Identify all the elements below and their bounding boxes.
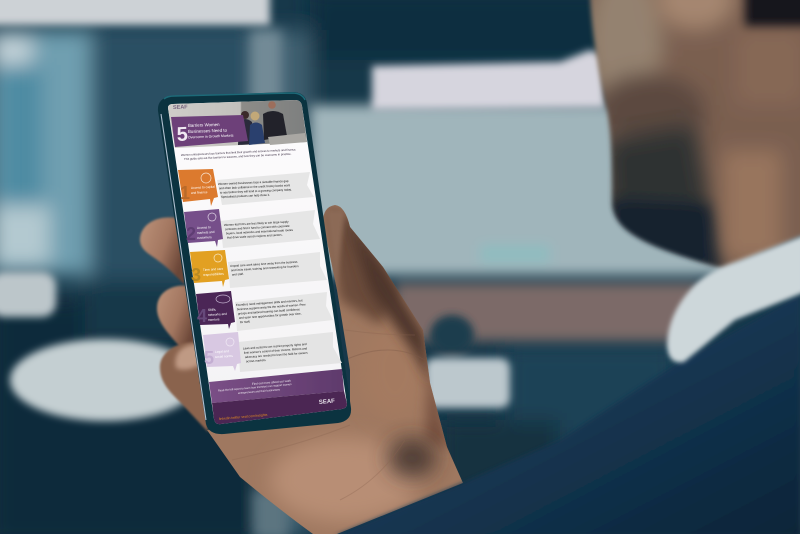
header photo	[168, 100, 307, 148]
body copy: groups and tailored training can build confidence	[238, 307, 301, 316]
item 3	[190, 250, 327, 288]
middle finger	[157, 286, 198, 347]
body copy: Women-owned businesses face a sizeable finance gap	[218, 179, 289, 186]
lilac callout	[203, 332, 241, 371]
body copy: that drive scale across regions and sectors.	[227, 233, 283, 240]
footer dark band	[212, 391, 347, 424]
number: 1	[180, 183, 190, 203]
body copy	[224, 220, 294, 240]
yellow callout	[190, 250, 229, 287]
body copy: to see before they will lend to a growing company today.	[220, 187, 292, 195]
body copy: Specialised products can help close it.	[221, 193, 270, 199]
icon	[208, 213, 216, 221]
body copy: Laws and customs can restrict property rights and	[243, 342, 307, 350]
footer purple band: entrepreneurs and their businesses	[238, 387, 281, 395]
body copy: and open new opportunities for growth over time.	[239, 312, 302, 320]
label: Access to capital	[191, 185, 215, 190]
dark purple callout	[196, 291, 235, 329]
arrow band	[235, 292, 333, 331]
body copy: and staff.	[232, 272, 244, 277]
item 2	[184, 209, 320, 248]
intro text: This guide sets out five barriers to success, and how they can be overcome in practice.	[184, 152, 292, 161]
label: Skills,	[208, 307, 216, 312]
label: Time and care	[203, 267, 224, 272]
item 3: responsibilities	[203, 272, 224, 277]
item 4	[196, 291, 333, 331]
man: navy jacket	[335, 295, 800, 534]
ring fingertip highlight	[175, 344, 204, 370]
phone side highlight	[161, 114, 206, 420]
arrow band	[228, 252, 327, 288]
body copy: and limits travel, training and networking for founders	[231, 264, 299, 272]
arrow band	[238, 332, 342, 372]
item 4: networks and	[208, 312, 227, 317]
item 1	[178, 169, 314, 206]
body copy: Founders need management skills and mentors, but	[236, 298, 303, 307]
item 2: customers	[197, 235, 212, 240]
item 5	[203, 332, 342, 372]
number: 3	[191, 265, 201, 285]
body copy: business support rarely fits the needs of women. Peer	[237, 302, 306, 311]
phone body	[158, 92, 351, 434]
phone screen infographic	[168, 100, 347, 424]
body copy: contracts and find it hard to connect with corporate	[225, 224, 290, 231]
body copy: and often lack collateral or the credit history banks want	[219, 183, 290, 190]
body copy	[230, 260, 299, 277]
body copy: advocacy are needed to level the field for owners	[245, 351, 308, 359]
item 4: mentors	[208, 317, 220, 322]
hand holding the phone	[140, 205, 463, 534]
orange callout	[178, 169, 218, 206]
body copy: across markets.	[246, 358, 267, 363]
header title banner	[171, 115, 248, 147]
label: Legal and	[215, 349, 229, 354]
body copy: buyers, local networks and international trade routes	[226, 228, 294, 235]
body copy: Women-led firms are less likely to win large supply	[224, 220, 289, 227]
man: head and beard	[587, 0, 800, 272]
body copy: limit women's control of their income. Reform and	[244, 346, 308, 355]
footer purple band: Read the full report to learn how investors can support women	[218, 382, 292, 392]
body copy	[236, 298, 306, 324]
icon	[214, 254, 222, 262]
item 2: markets and	[197, 230, 215, 235]
number: 4	[197, 306, 207, 326]
footer purple band: Find out more about our work	[252, 379, 292, 386]
icon	[226, 338, 234, 346]
arrow band	[220, 210, 320, 248]
palm and wrist	[207, 205, 463, 534]
number: 2	[186, 224, 196, 244]
header title banner: Businesses Need to	[188, 128, 228, 134]
item 1: and finance	[191, 190, 208, 195]
icon	[201, 173, 211, 183]
label: Access to	[197, 225, 211, 230]
header title banner: 5	[176, 124, 188, 146]
ring finger	[160, 342, 208, 432]
purple callout	[184, 209, 223, 247]
header logo: SEAF	[173, 104, 188, 111]
phone top edge highlight	[164, 93, 305, 100]
intro text: Women entrepreneurs face barriers that limit their growth and access to markets and finance.	[181, 147, 297, 157]
man: white shirt collar	[667, 235, 800, 362]
footer links: linkedin twitter seaf.com/insights	[219, 413, 268, 421]
arrow band	[217, 172, 314, 205]
screen background	[168, 100, 347, 424]
index finger	[140, 217, 185, 285]
item 5: social norms	[215, 354, 233, 359]
body copy: for staff.	[240, 319, 251, 324]
footer logo: SEAF	[319, 399, 335, 406]
header title banner: Overcome in Growth Markets	[188, 134, 234, 139]
footer purple band	[209, 369, 344, 403]
people in the photo	[238, 101, 307, 145]
number: 5	[204, 348, 214, 368]
body copy: Unpaid care work takes time away from the business	[230, 260, 298, 268]
icon	[216, 295, 230, 303]
body copy	[218, 179, 292, 199]
phone	[158, 92, 351, 434]
body copy	[243, 342, 308, 363]
header title banner: Barriers Women	[188, 122, 220, 128]
